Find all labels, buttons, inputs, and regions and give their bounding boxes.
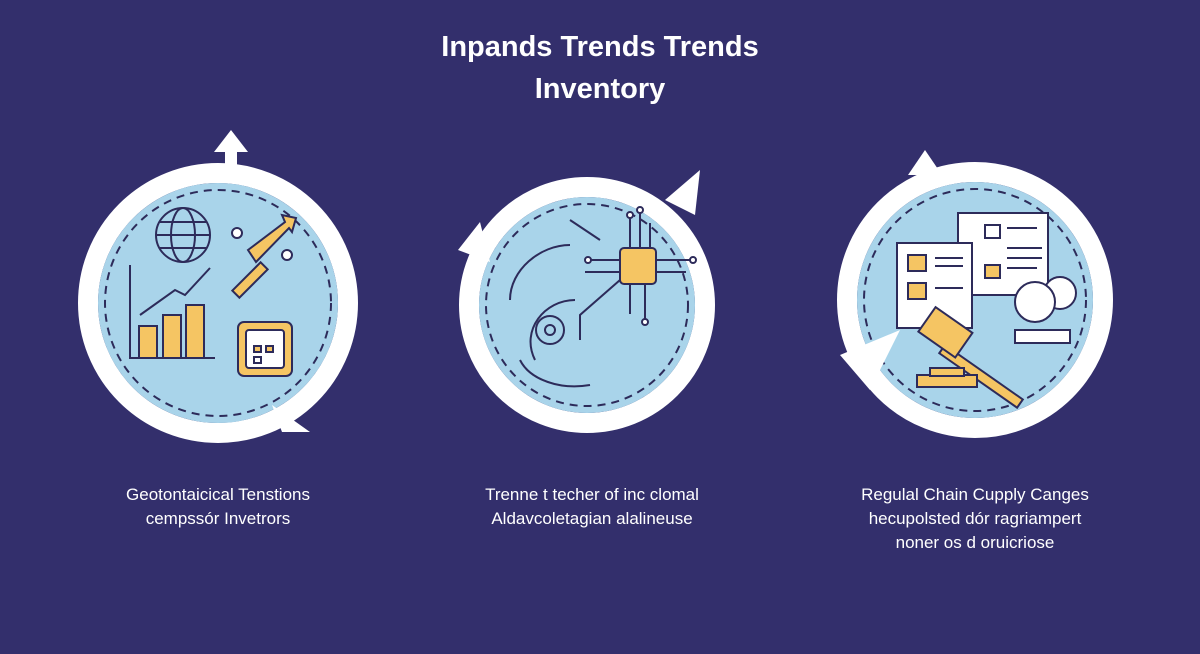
caption: right: Regulal Chain Cupply Canges xyxy=(861,485,1089,504)
caption: right: hecupolsted dór ragriampert xyxy=(869,509,1081,528)
panel: right circle xyxy=(840,150,1103,428)
arrow: up xyxy=(214,130,248,180)
icon: people xyxy=(1015,277,1076,343)
caption: left xyxy=(126,485,310,528)
title xyxy=(441,31,759,105)
caption: right: noner os d oruicriose xyxy=(896,533,1054,552)
arrow: left xyxy=(840,330,900,390)
caption: left: cempssór Invetrors xyxy=(146,509,290,528)
icon: gavel xyxy=(917,307,1023,408)
icon: rising arrow xyxy=(232,215,296,298)
icon: documents xyxy=(897,213,1048,328)
caption: right xyxy=(861,485,1089,552)
arrow: left xyxy=(458,222,490,262)
icon: globe xyxy=(156,208,210,262)
panel: left circle xyxy=(88,130,348,433)
icon: chip xyxy=(238,322,292,376)
title: Inventory xyxy=(535,73,665,105)
caption: middle xyxy=(485,485,699,528)
arrow: up xyxy=(908,150,942,175)
panel: middle circle xyxy=(458,170,705,423)
arrow: down-right xyxy=(272,405,310,432)
icon: circuit chip xyxy=(510,207,696,386)
title: Inpands Trends Trends xyxy=(441,31,759,63)
caption: middle: Aldavcoletagian alalineuse xyxy=(491,509,693,528)
caption: middle: Trenne t techer of inc clomal xyxy=(485,485,699,504)
arrow: top-right xyxy=(665,170,700,215)
icon: bar chart xyxy=(130,265,215,358)
caption: left: Geotontaicical Tenstions xyxy=(126,485,310,504)
